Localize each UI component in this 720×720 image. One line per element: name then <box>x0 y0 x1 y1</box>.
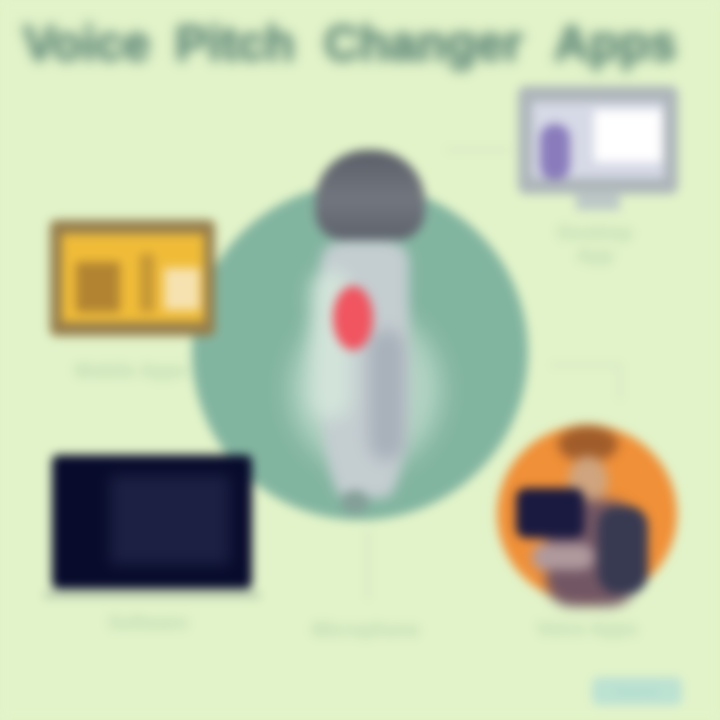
central green circle <box>192 184 528 520</box>
torso <box>546 500 636 606</box>
title: Apps <box>554 17 676 71</box>
face <box>568 456 608 506</box>
card frame <box>50 220 215 336</box>
badge: bottom right: Source <box>615 683 659 699</box>
hair <box>558 426 618 462</box>
label: bottom center: Microphone <box>312 620 420 641</box>
title <box>16 16 683 79</box>
microphone body highlight <box>311 270 351 420</box>
microphone sound glow <box>291 310 441 470</box>
monitor purple figure <box>540 124 570 180</box>
microphone tip <box>341 490 369 514</box>
title: Voice <box>23 17 150 71</box>
laptop base <box>44 592 260 598</box>
icon: microphone <box>280 142 452 514</box>
laptop dark <box>516 488 584 538</box>
panel: orange circle person <box>490 416 684 616</box>
orange disc <box>497 425 677 603</box>
label: bottom right: Voice Apps <box>536 619 638 640</box>
panel: bottom left laptop <box>43 446 261 602</box>
label: left card: Mobile Apps <box>75 361 187 382</box>
title: Pitch <box>175 17 295 71</box>
light arm <box>532 544 594 570</box>
microphone body shadow side <box>369 330 405 460</box>
badge: bottom right <box>592 677 682 705</box>
label: top right: App <box>577 246 613 267</box>
card light panel <box>164 268 200 310</box>
panel: top right monitor <box>512 80 684 214</box>
monitor stand <box>576 192 620 210</box>
card dark figures <box>76 262 120 312</box>
laptop screen <box>52 455 252 589</box>
panel: left video card <box>43 213 222 344</box>
label: bottom left: Software <box>108 613 188 634</box>
monitor frame <box>518 86 678 194</box>
card middle figure <box>140 254 154 312</box>
label: top right: Desktop <box>558 223 632 244</box>
monitor white window <box>594 110 662 162</box>
microphone red button <box>333 286 373 350</box>
monitor inner light area <box>532 102 664 178</box>
microphone head <box>315 150 425 240</box>
laptop screen text glow <box>110 475 230 565</box>
dark sleeve <box>598 506 648 594</box>
card yellow screen <box>62 234 204 322</box>
title: Changer <box>324 17 523 71</box>
label: top right <box>558 223 632 267</box>
microphone body <box>321 240 409 498</box>
